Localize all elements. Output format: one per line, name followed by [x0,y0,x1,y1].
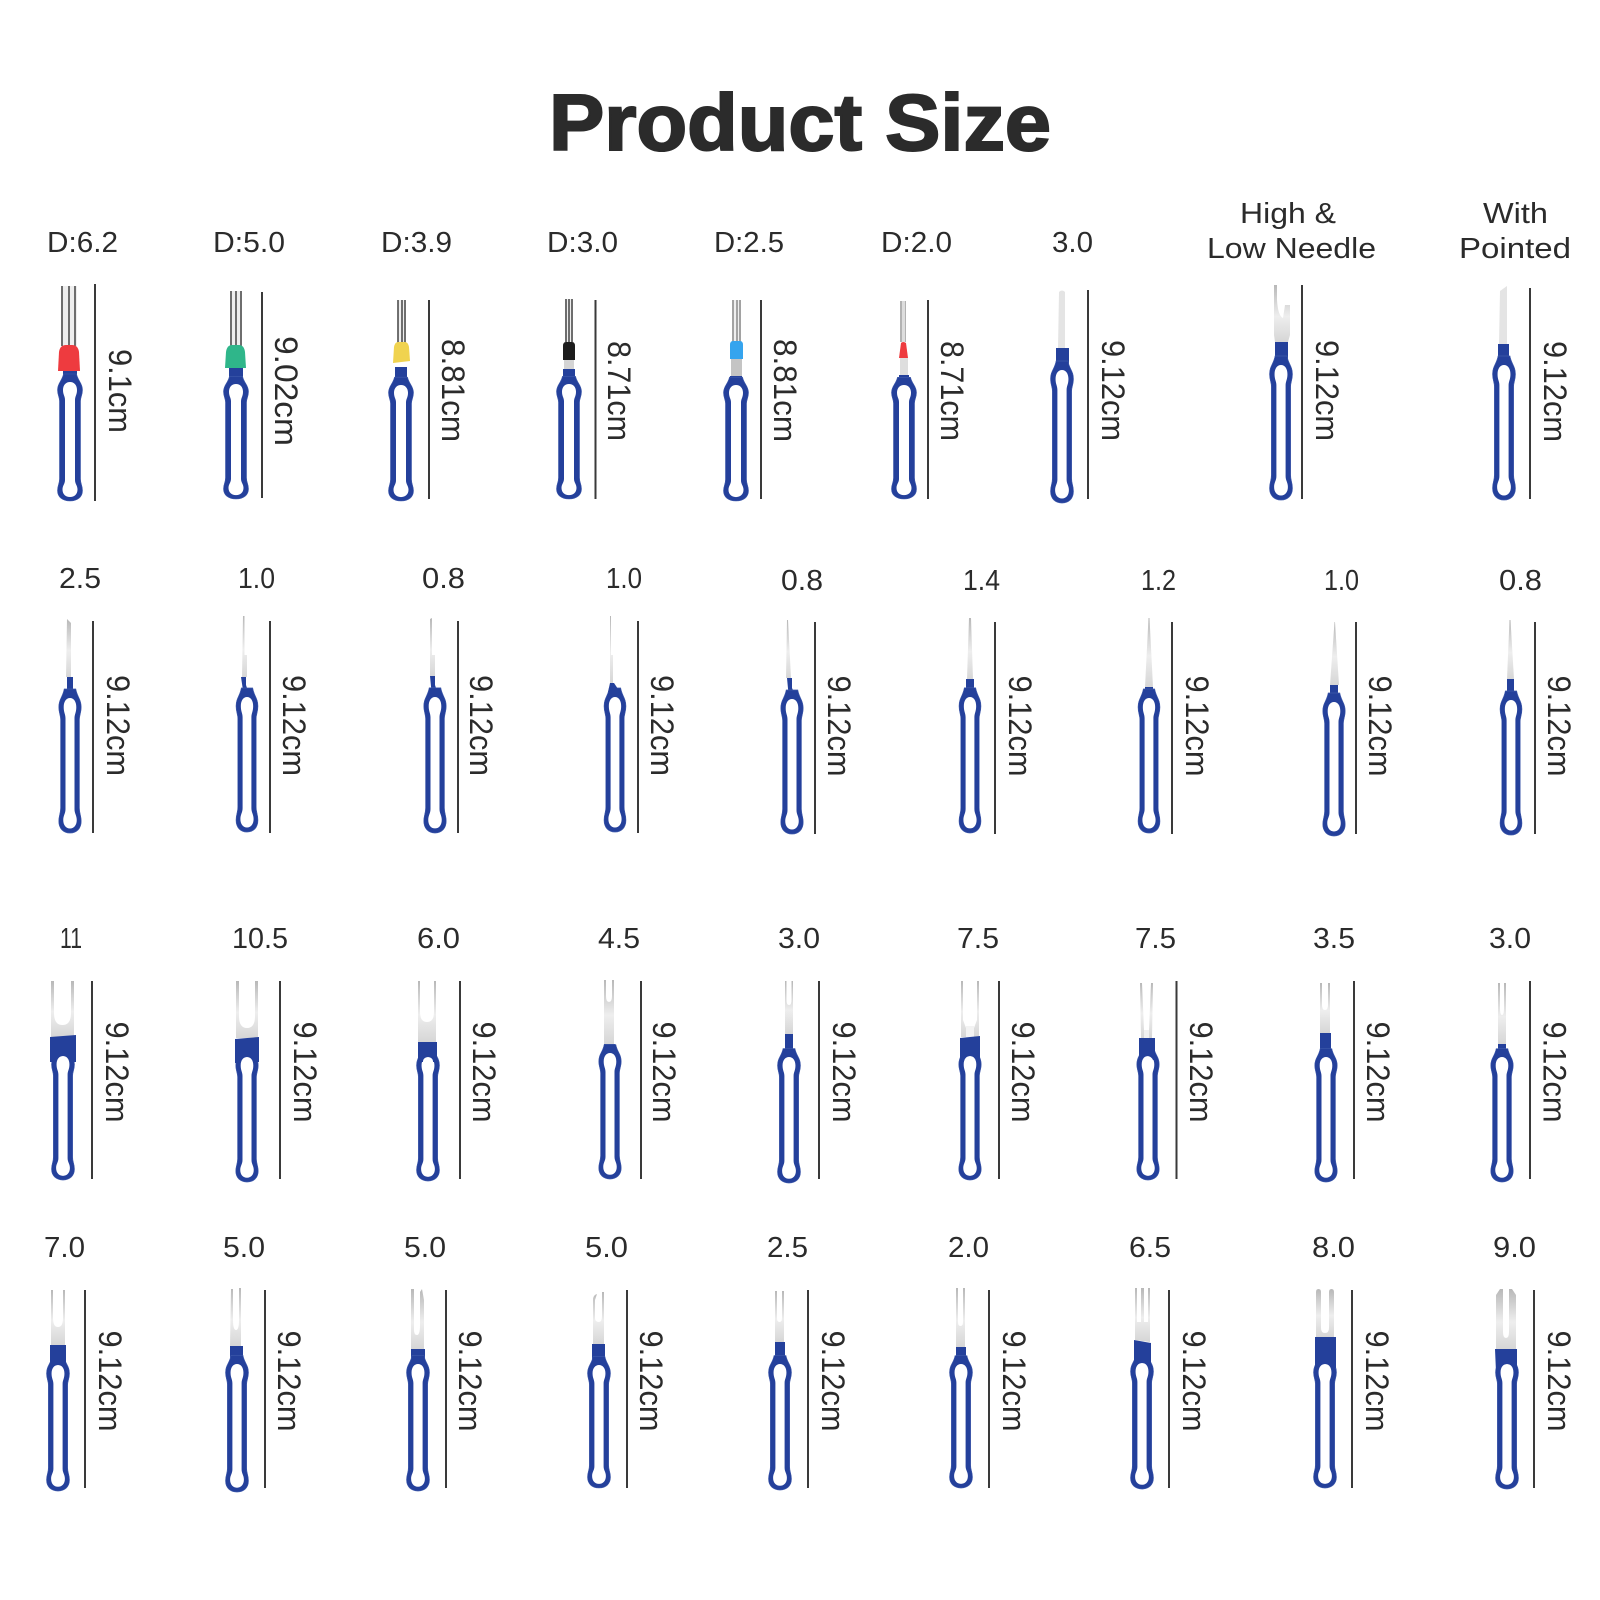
dimension line [760,300,762,499]
size label: D:3.9 [381,227,452,259]
size label: With [1483,198,1548,230]
size label: D:6.2 [47,227,118,259]
length label: 9.12cm [1537,341,1573,442]
dimension line [279,981,281,1179]
length label: 9.12cm [100,675,136,776]
size label: 5.0 [223,1232,265,1264]
tool: 10.5 [232,923,323,1182]
tool: 11 [50,923,135,1180]
dimension line [594,300,596,499]
size label: 7.5 [1135,923,1176,955]
size label: 3.0 [1052,227,1093,259]
length label: 9.12cm [644,675,680,776]
dimension line [1533,1290,1535,1488]
size label: 2.5 [59,563,101,595]
dimension line [637,621,639,833]
tool: 0.8 (row 2, fifth) [781,565,857,834]
fork tool [1137,983,1159,1180]
tool: 3.0 (row 3, ninth) [1489,923,1572,1182]
tool: 2.5 (row 2) [59,563,136,833]
length label: 9.12cm [646,1022,682,1122]
size label: 6.5 [1129,1232,1171,1264]
size label: 4.5 [598,923,640,955]
tool: 1.2 [1138,565,1215,834]
size label: D:5.0 [213,227,285,259]
dimension line [994,622,996,834]
size label: High & [1240,198,1336,230]
tool: 5.0 (row 4, second) [223,1232,307,1492]
size label: Low Needle [1207,233,1376,265]
size label: 7.0 [44,1232,85,1264]
dimension line [1351,1290,1353,1488]
needle tool [1323,622,1345,836]
dimension line [269,621,271,833]
dimension line [988,1290,990,1488]
tool: 0.8 (row 2, ninth) [1499,565,1577,835]
fork tool [46,1290,70,1491]
dimension line [91,981,93,1179]
needle tool [224,291,248,499]
size label: 10.5 [232,923,288,955]
dimension line [1168,1290,1170,1488]
dimension line [640,981,642,1179]
length label: 9.12cm [1536,1022,1572,1122]
length label: 9.12cm [633,1330,669,1432]
tool: D:6.2 [47,227,138,501]
tool: 1.0 (row 2, fourth) [604,563,680,833]
dimension line [1087,290,1089,499]
tool: 1.0 (row 2) [236,563,312,833]
needle tool [556,299,582,499]
dimension line [1353,981,1355,1179]
tool: 3.0 (row 3) [778,923,862,1183]
dimension line [261,292,263,498]
needle tool [1270,285,1292,500]
dimension line [814,622,816,834]
dimension line [457,621,459,833]
size label: 5.0 [404,1232,446,1264]
dimension line [84,1290,86,1488]
size label [1207,198,1376,265]
length label: 9.12cm [826,1022,862,1122]
fork tool [1491,983,1513,1182]
needle tool [236,616,258,832]
size label: 3.5 [1313,923,1355,955]
needle tool [1138,618,1160,833]
tool: 5.0 (row 4, fourth) [585,1232,669,1488]
fork tool [226,1288,248,1492]
size label: D:3.0 [547,227,618,259]
size label: 9.0 [1493,1232,1536,1264]
dimension line [1176,981,1178,1179]
size label: 1.0 [1324,565,1359,597]
length label: 9.12cm [271,1330,307,1432]
length label: 9.12cm [815,1330,851,1432]
tool: 3.5 [1313,923,1396,1182]
title: Product Size [549,78,1051,167]
tool: 1.4 [959,565,1038,834]
length label: 9.12cm [92,1330,128,1432]
tool: 4.5 [598,923,682,1179]
dimension line [1301,285,1303,499]
fork tool [950,1288,972,1488]
tool: 9.0 [1493,1232,1577,1489]
needle tool [58,286,82,501]
fork tool [588,1292,610,1488]
tool: D:5.0 [213,227,304,499]
dimension line [264,1290,266,1488]
length label: 8.81cm [767,339,803,442]
needle tool [724,300,748,501]
needle tool [604,616,626,832]
dimension line [1534,622,1536,834]
size label [1459,198,1571,265]
size label: Pointed [1459,233,1571,265]
fork tool [235,981,259,1182]
tool: 1.0 (row 2, eighth) [1323,565,1398,836]
size label: 0.8 [1499,565,1542,597]
dimension line [1529,981,1531,1179]
size label: 8.0 [1312,1232,1355,1264]
tool: 3.0 [1050,227,1131,503]
length label: 8.71cm [934,341,970,441]
tool: D:2.5 [714,227,803,501]
size label: 5.0 [585,1232,628,1264]
tool: 7.5 (row 3, sixth) [957,923,1041,1180]
needle tool [959,618,981,833]
length label: 9.02cm [268,336,304,446]
length label: 9.12cm [1359,1330,1395,1432]
length label: 9.12cm [466,1022,502,1122]
fork tool [416,981,440,1181]
length label: 9.12cm [287,1022,323,1122]
length label: 9.12cm [452,1330,488,1432]
size label: 3.0 [778,923,820,955]
fork tool [599,980,621,1179]
tool: 2.0 [948,1232,1032,1488]
size label: 3.0 [1489,923,1531,955]
length label: 9.12cm [1541,1330,1577,1432]
length label: 9.12cm [996,1330,1032,1432]
fork tool [1130,1288,1154,1489]
dimension line [807,1290,809,1488]
size label: 1.2 [1141,565,1176,597]
length label: 9.12cm [1095,340,1131,441]
tool: 7.0 [44,1232,128,1491]
length label: 8.71cm [601,341,637,441]
dimension line [626,1290,628,1488]
fork tool [959,981,981,1180]
fork tool [50,981,76,1180]
dimension line [1171,622,1173,834]
size label: 1.0 [238,563,275,595]
length label: 9.12cm [1360,1022,1396,1122]
fork tool [768,1291,792,1490]
needle tool [1492,286,1516,500]
size label: 0.8 [422,563,465,595]
length label: 9.12cm [1002,676,1038,776]
tool: 8.0 [1312,1232,1395,1488]
fork tool [406,1289,430,1491]
length label: 9.12cm [1176,1330,1212,1432]
needle tool [1500,620,1522,835]
length label: 9.12cm [1005,1022,1041,1122]
size label: D:2.0 [881,227,952,259]
needle tool [388,300,414,501]
dimension line [1355,622,1357,834]
length label: 9.12cm [821,676,857,776]
dimension line [459,981,461,1179]
needle tool [892,301,916,499]
fork tool [1314,1289,1336,1488]
length label: 9.1cm [102,349,138,433]
length label: 9.12cm [1179,676,1215,776]
length label: 9.12cm [463,675,499,776]
length label: 9.12cm [1309,340,1345,441]
tool: With Pointed [1459,198,1573,500]
size label: 1.4 [963,565,1000,597]
size label: 2.5 [767,1232,808,1264]
length label: 9.12cm [99,1022,135,1122]
dimension line [998,981,1000,1179]
dimension line [1529,288,1531,499]
needle tool [59,619,81,833]
size label: 7.5 [957,923,999,955]
size label: 1.0 [606,563,642,595]
length label: 9.12cm [1362,676,1398,776]
needle tool [424,618,446,833]
needle tool [1050,290,1074,503]
tool: D:3.9 [381,227,471,501]
fork tool [1495,1289,1518,1489]
length label: 9.12cm [1541,676,1577,776]
tool: D:3.0 [547,227,637,499]
tool: 5.0 (row 4, third) [404,1232,488,1491]
dimension line [445,1290,447,1488]
size label: D:2.5 [714,227,784,259]
length label: 9.12cm [276,675,312,776]
length label: 9.12cm [1183,1022,1219,1122]
size label: 6.0 [417,923,460,955]
tool: D:2.0 [881,227,970,499]
fork tool [778,981,800,1183]
size label: 2.0 [948,1232,989,1264]
fork tool [1315,983,1337,1182]
dimension line [818,981,820,1179]
tool: 0.8 (row 2) [422,563,499,833]
tool: 6.0 [416,923,502,1181]
needle tool [781,620,803,834]
dimension line [428,300,430,499]
dimension line [92,621,94,833]
dimension line [927,300,929,499]
tool: High & Low Needle [1207,198,1376,500]
size label: 0.8 [781,565,823,597]
tool: 2.5 (row 4) [767,1232,851,1490]
dimension line [94,284,96,501]
tool: 7.5 (row 3, seventh) [1135,923,1219,1180]
length label: 8.81cm [435,339,471,442]
tool: 6.5 [1129,1232,1212,1489]
size label: 11 [60,923,82,955]
